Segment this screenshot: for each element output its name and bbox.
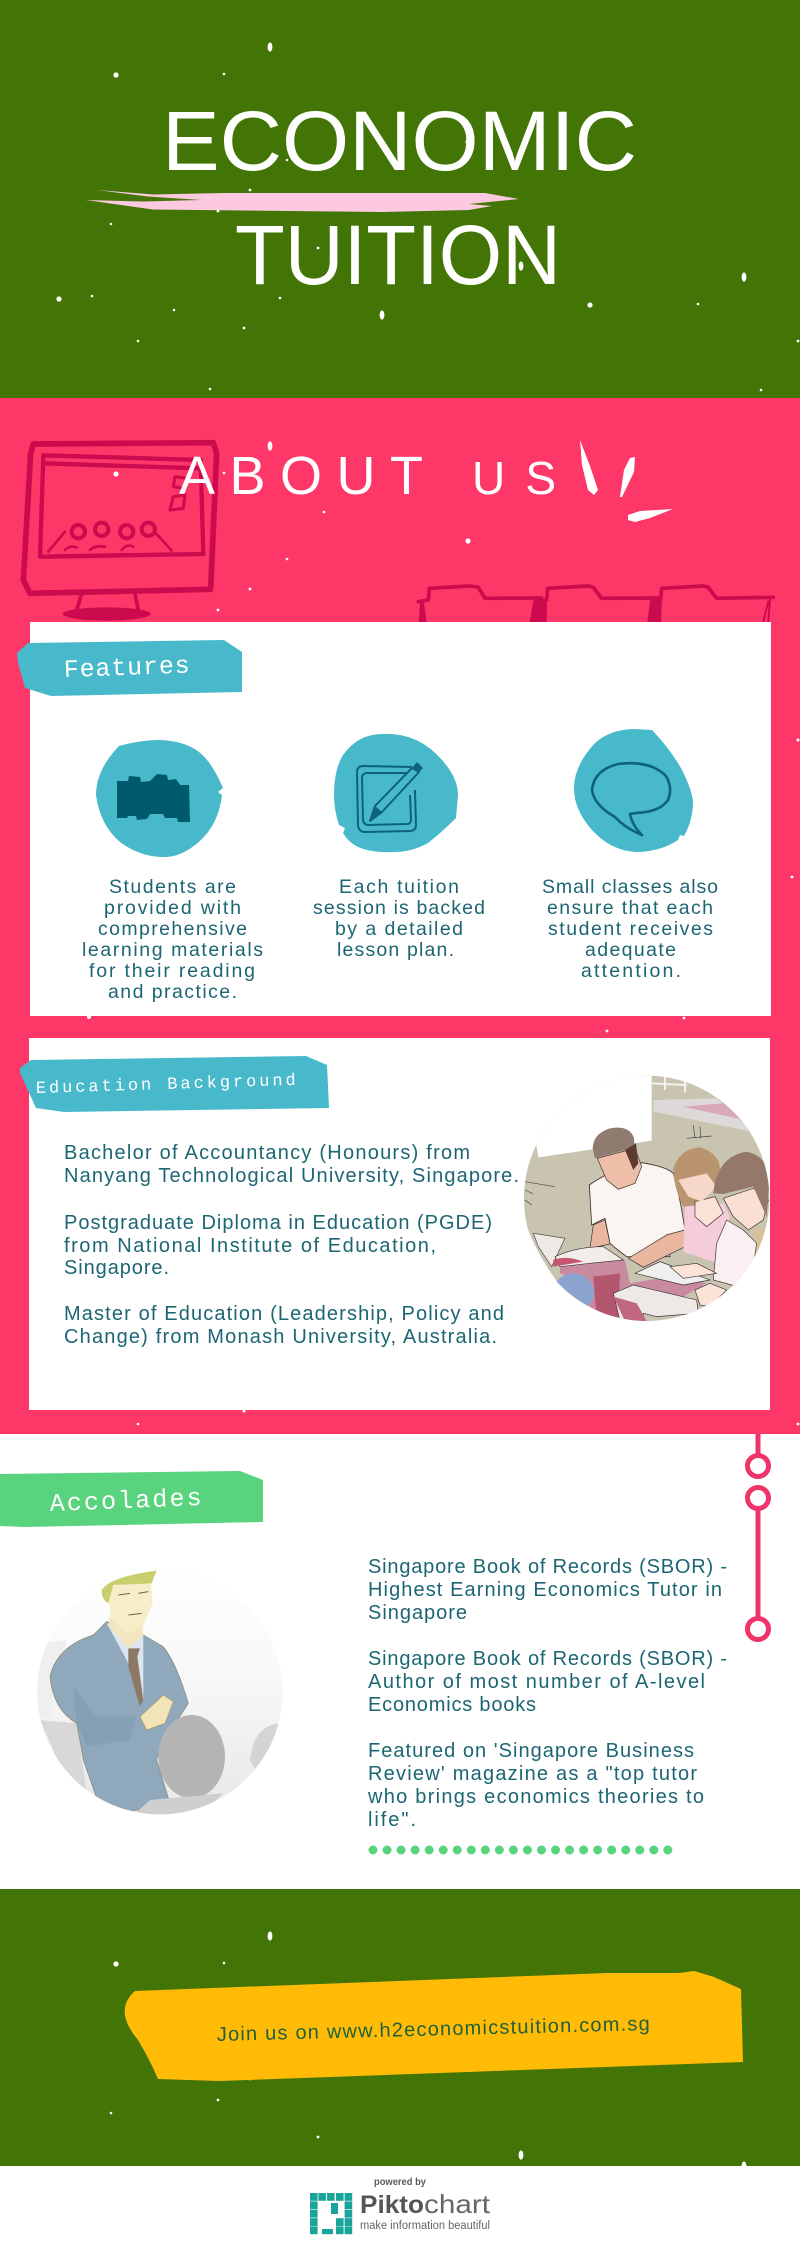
text: education list: Nanyang Technological University, Singapore.: [64, 1165, 519, 1187]
text: feature 2: [313, 876, 485, 961]
logo: piktochart wordmark: make information beautiful: [360, 2220, 490, 2232]
feature icon: speech bubble: [574, 729, 693, 852]
text: feature 2: lesson plan.: [337, 939, 454, 961]
tag: accolades: [0, 1471, 263, 1527]
text: accolades list: Singapore Book of Records (SBOR) -: [368, 1648, 727, 1670]
text: accolades list: Singapore Book of Records (SBOR) -: [368, 1556, 727, 1578]
text: accolades list: life".: [368, 1809, 416, 1831]
dotted divider: [373, 1846, 668, 1854]
callout text: Join us on www.h2economicstuition.com.sg: [217, 2013, 650, 2046]
text: feature 3: adequate: [585, 939, 676, 961]
text: feature 1: Students are: [109, 876, 236, 898]
powered by label: powered by: [374, 2176, 426, 2188]
speckles: about: [56, 441, 799, 790]
feature icon: books: [96, 740, 223, 857]
text: accolades list: Featured on 'Singapore Business: [368, 1740, 694, 1762]
text: feature 1: provided with: [104, 897, 241, 919]
text: accolades list: [367, 1556, 727, 1831]
title: ECONOMIC: [162, 94, 637, 188]
panel: features: [30, 622, 771, 1016]
speckles: header: [56, 42, 799, 391]
text: accolades list: Author of most number of A-level: [368, 1671, 705, 1693]
text: feature 2: session is backed: [313, 897, 485, 919]
text: feature 1: for their reading: [89, 960, 255, 982]
illustration: presenter: [38, 1570, 282, 1814]
text: education list: Singapore.: [64, 1257, 169, 1279]
text: accolades list: Review' magazine as a "top tutor: [368, 1763, 697, 1785]
icon: exclamation strokes: [580, 440, 673, 522]
callout: join us: [125, 1971, 743, 2081]
tag: education background: [20, 1056, 329, 1112]
text: feature 3: student receives: [548, 918, 713, 940]
tag label: accolades: Accolades: [49, 1484, 202, 1519]
text: feature 1: comprehensive: [98, 918, 247, 940]
text: feature 2: by a detailed: [335, 918, 463, 940]
illustration: students studying: [524, 1076, 770, 1321]
title: TUITION: [235, 208, 561, 302]
text: feature 3: attention.: [581, 960, 681, 982]
text: accolades list: Singapore: [368, 1602, 467, 1624]
tag label: features: Features: [63, 652, 190, 685]
text: feature 3: ensure that each: [547, 897, 713, 919]
tag: features: [17, 640, 242, 696]
text: education list: from National Institute of Education,: [64, 1235, 436, 1257]
text: feature 1: and practice.: [108, 981, 237, 1003]
panel: education background: [29, 1038, 770, 1410]
text: feature 2: Each tuition: [339, 876, 459, 898]
heading: about us: [179, 440, 673, 522]
about section background: [0, 398, 800, 1434]
header background: [0, 0, 800, 399]
text: feature 3: [542, 876, 718, 982]
text: education list: [64, 1142, 519, 1348]
logo: piktochart wordmark: chart: [424, 2189, 491, 2219]
text: feature 1: learning materials: [82, 939, 263, 961]
text: accolades list: who brings economics theories to: [367, 1786, 704, 1808]
title: [162, 94, 637, 302]
footer white strip: [0, 2166, 800, 2246]
icon: monitor sketch: [23, 443, 217, 621]
text: education list: Master of Education (Leadership, Policy and: [64, 1303, 504, 1325]
heading: about us: ABOUT: [179, 446, 423, 506]
logo: piktochart wordmark: Pikto: [360, 2191, 424, 2219]
text: accolades list: Economics books: [368, 1694, 536, 1716]
connector line with rings: [748, 1434, 768, 1640]
icon: folder sketches: [418, 586, 773, 622]
logo: piktochart mark: [310, 2193, 352, 2234]
tag label: education background: Education Background: [36, 1072, 296, 1099]
text: accolades list: Highest Earning Economics Tutor in: [368, 1579, 722, 1601]
speckles over pink margins: [87, 739, 799, 1425]
text: feature 1: [82, 876, 263, 1003]
text: education list: Change) from Monash University, Australia.: [64, 1326, 497, 1348]
footer banner background: [0, 1889, 800, 2166]
text: education list: Postgraduate Diploma in Education (PGDE): [64, 1212, 492, 1234]
text: feature 3: Small classes also: [542, 876, 718, 898]
heading: about us: US: [472, 452, 556, 504]
pink brush stroke: [86, 190, 519, 212]
feature icon: lesson plan: [334, 734, 458, 852]
text: education list: Bachelor of Accountancy (Honours) from: [64, 1142, 470, 1164]
speckles: footer banner: [56, 1931, 799, 2246]
logo: piktochart wordmark: [360, 2189, 491, 2232]
